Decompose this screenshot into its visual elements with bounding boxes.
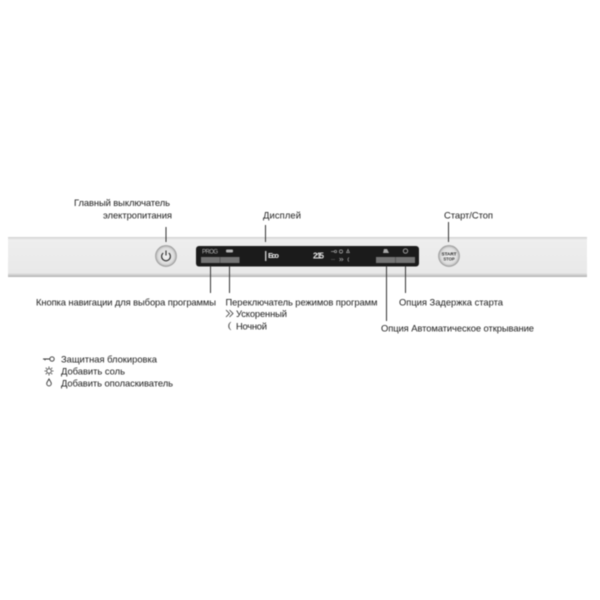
- time readout: 2:15: [313, 252, 325, 260]
- label: program mode switch: Ночной: [236, 320, 267, 332]
- start stop button: STOP: [443, 256, 455, 262]
- icon: key lock: [43, 357, 54, 361]
- icon: rinse aid drop: [47, 379, 51, 386]
- legend text: child lock: Защитная блокировка: [61, 354, 158, 364]
- Eco indicator: Eco: [268, 251, 279, 260]
- label: program mode switch: Переключатель режимов программ: [226, 296, 378, 308]
- label: program mode switch: [226, 296, 378, 332]
- icon: auto open: [383, 249, 389, 253]
- label: start delay option: Опция Задержка старта: [399, 296, 504, 308]
- Eco indicator: [265, 251, 279, 261]
- icon: delay clock: [403, 249, 408, 253]
- icon: fast mode: [226, 310, 233, 317]
- label: main power switch: электропитания: [103, 210, 172, 220]
- legend text: add salt: Добавить соль: [61, 366, 125, 376]
- start stop button: START: [442, 252, 457, 256]
- power button: [156, 246, 176, 266]
- display panel: [196, 246, 419, 266]
- label: navigation button: Кнопка навигации для выбора программы: [36, 296, 216, 308]
- PROG label: PROG: [202, 250, 218, 256]
- left touch buttons: [201, 257, 240, 263]
- start stop button: [438, 246, 460, 266]
- label: display: Дисплей: [263, 210, 301, 220]
- label: main power switch: Главный выключатель: [74, 197, 170, 208]
- icon: spray: [226, 250, 233, 252]
- legend text: add rinse aid: Добавить ополаскиватель: [61, 378, 173, 388]
- label: program mode switch: Ускоренный: [236, 308, 287, 319]
- legend: [43, 354, 173, 388]
- label: main power switch: [74, 197, 172, 220]
- leader lines: [166, 222, 448, 321]
- indicator icons: [331, 250, 349, 262]
- icon: salt: [44, 366, 54, 376]
- label: start stop: Старт/Стоп: [444, 210, 493, 220]
- label: auto open option: Опция Автоматическое открывание: [381, 322, 534, 334]
- right touch buttons: [376, 257, 415, 263]
- control panel strip: [8, 237, 587, 277]
- icon: night mode: [229, 322, 231, 330]
